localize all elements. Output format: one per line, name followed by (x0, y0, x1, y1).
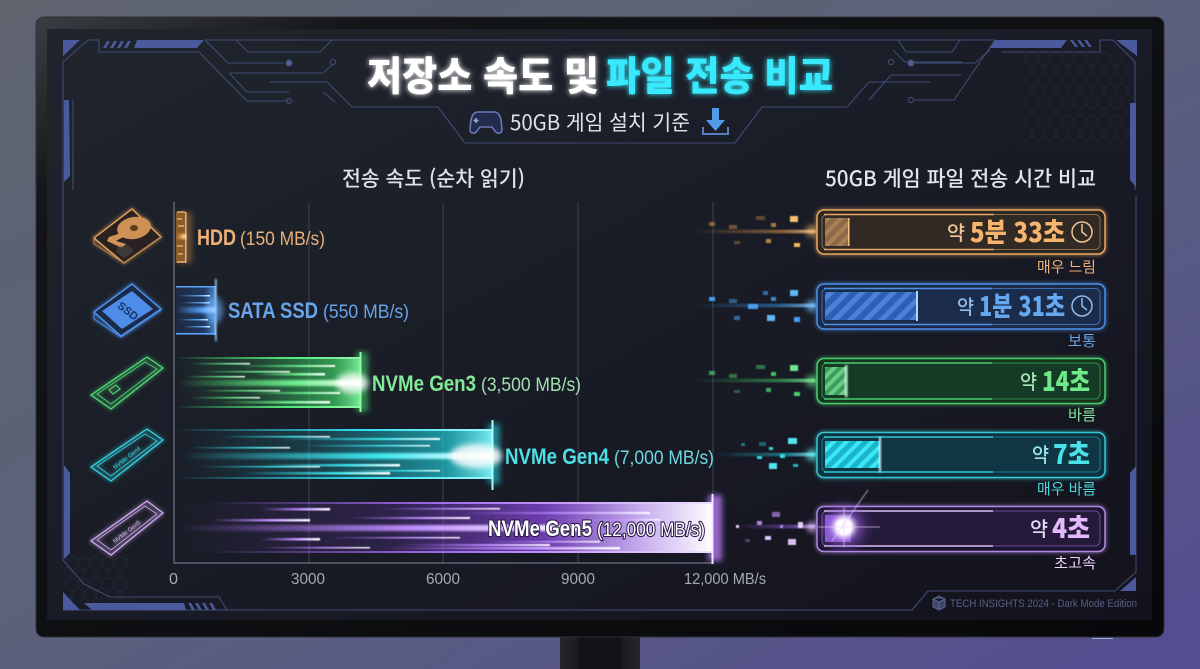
status: normal: 보통 (1068, 330, 1096, 351)
icon: starburst (818, 490, 880, 547)
time panel: NVMe Gen5: 약 (1030, 513, 1048, 542)
time panel: SATA SSD: 1분 31초 (979, 285, 1065, 324)
bar label: SATA SSD: (550 MB/s) (323, 302, 409, 323)
bar label: NVMe Gen4: NVMe Gen4 (505, 444, 610, 469)
icon: game controller (470, 112, 502, 133)
section heading: transfer time: 50GB 게임 파일 전송 시간 비교 (825, 163, 1096, 193)
bar label: NVMe Gen5: NVMe Gen5 (488, 516, 592, 541)
status: very slow: 매우 느림 (1037, 256, 1096, 277)
time panel: NVMe Gen5 (817, 490, 1105, 573)
icon: clock (1072, 296, 1092, 316)
bar: NVMe Gen3 (176, 352, 368, 412)
title (367, 44, 833, 102)
decorative frame and circuit traces (63, 40, 1136, 610)
section heading: transfer speed: 전송 속도 (순차 읽기) (342, 163, 525, 193)
subtitle text: 50GB 게임 설치 기준 (510, 107, 690, 137)
hexagon texture: corners (66, 50, 1134, 601)
subtitle with icons (470, 107, 728, 137)
icon: clock (1072, 222, 1092, 242)
bar label: SATA SSD: SATA SSD (228, 298, 318, 323)
icon: SATA SSD (94, 284, 161, 337)
bar: NVMe Gen5 (176, 494, 722, 564)
axis labels: 12,000 MB/s (684, 571, 766, 588)
bar label: HDD (197, 225, 325, 250)
time panel: HDD (817, 210, 1105, 277)
time panel: NVMe Gen4: 약 (1032, 439, 1049, 468)
status: ultra fast: 초고속 (1054, 552, 1096, 573)
bar label: NVMe Gen4 (505, 444, 714, 469)
icon: download arrow (703, 108, 728, 134)
time panel: NVMe Gen5: 4초 (1052, 507, 1090, 546)
particle trail: NVMe Gen4 (715, 438, 818, 469)
axis labels: 6000 (426, 571, 460, 588)
bar label: NVMe Gen3 (372, 371, 581, 396)
bar label: HDD: (150 MB/s) (240, 229, 325, 250)
bar: NVMe Gen4 (176, 420, 502, 490)
time panel: NVMe Gen4: 7초 (1053, 433, 1090, 472)
status: fast: 바름 (1068, 404, 1096, 425)
axis labels (169, 571, 766, 588)
bar label: NVMe Gen5 (488, 516, 705, 541)
icon: SATA SSD: SSD (115, 300, 140, 323)
icon: NVMe Gen5 (91, 501, 163, 555)
bar: HDD (176, 212, 192, 263)
axis labels: 3000 (291, 571, 325, 588)
bar label: NVMe Gen4: (7,000 MB/s) (614, 448, 714, 469)
bar label: NVMe Gen3: NVMe Gen3 (372, 371, 476, 396)
title: 파일 전송 비교 (606, 44, 833, 102)
bar: SATA SSD (176, 279, 223, 341)
icon: NVMe Gen3 (91, 357, 163, 409)
particle trail: NVMe Gen5 (735, 512, 817, 545)
axis labels: 0 (169, 571, 178, 588)
title: 저장소 속도 및 (367, 44, 599, 102)
bar label: NVMe Gen5: (12,000 MB/s) (597, 520, 705, 541)
axis labels: 9000 (561, 571, 595, 588)
time panel: SATA SSD (817, 284, 1105, 351)
time panel: NVMe Gen3: 14초 (1042, 360, 1090, 399)
bar label: NVMe Gen3: (3,500 MB/s) (481, 375, 581, 396)
icon: NVMe Gen4: NVMe Gen4 (113, 446, 143, 471)
particle trail: SATA SSD (695, 290, 818, 322)
icon: NVMe Gen4 (91, 429, 163, 481)
chart grid and axes (174, 202, 713, 563)
status: very fast: 매우 바름 (1037, 478, 1096, 499)
monitor stand (560, 636, 640, 669)
time panel: HDD: 5분 33초 (970, 211, 1065, 250)
time panel: SATA SSD: 약 (957, 291, 974, 320)
time panel: NVMe Gen3 (817, 358, 1105, 425)
icon: HDD (94, 209, 161, 263)
bar label: HDD: HDD (197, 225, 236, 250)
icon: NVMe Gen5: NVMe Gen5 (113, 520, 143, 545)
time panel: HDD: 약 (947, 217, 965, 246)
footer credit: TECH INSIGHTS 2024 - Dark Mode Edition (950, 598, 1137, 610)
time panel: NVMe Gen4 (817, 432, 1105, 499)
corner accents (63, 40, 1137, 610)
icon: cube logo (933, 596, 945, 610)
bar label: SATA SSD (228, 298, 409, 323)
particle trail: NVMe Gen3 (695, 365, 818, 396)
time panel: NVMe Gen3: 약 (1020, 366, 1037, 395)
particle trail: HDD (695, 216, 818, 247)
